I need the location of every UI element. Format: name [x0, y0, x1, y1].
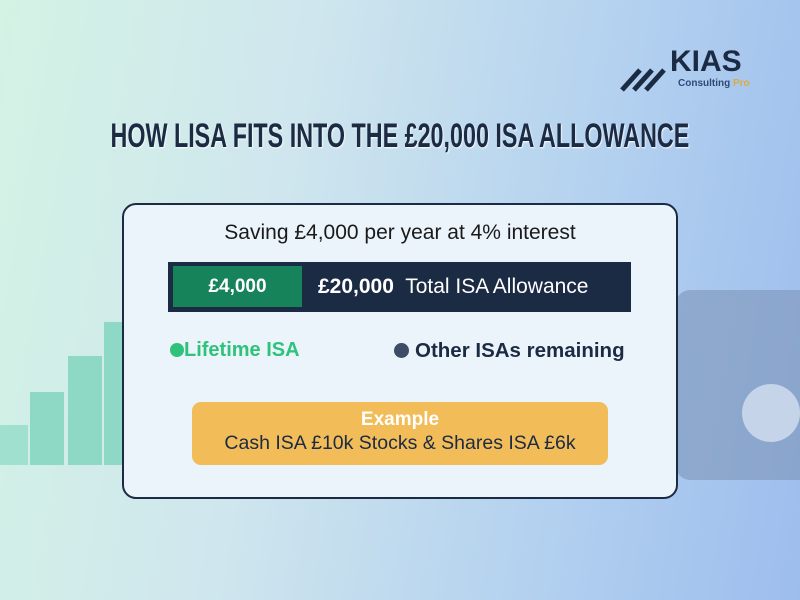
lisa segment: £4,000	[208, 276, 267, 297]
allowance bar	[168, 262, 631, 312]
total label: £20,000 Total ISA Allowance	[318, 275, 588, 298]
logo	[620, 45, 750, 92]
lisa segment	[173, 266, 302, 307]
example box: Example	[361, 409, 439, 430]
example box	[192, 402, 608, 465]
title: HOW LISA FITS INTO THE £20,000 ISA ALLOWANCE	[111, 117, 689, 155]
logo: Consulting Pro	[678, 78, 750, 89]
decorative bar chart background	[0, 322, 122, 465]
logo: KIAS	[670, 45, 742, 78]
panel: card	[122, 203, 678, 499]
decorative device right	[676, 290, 800, 480]
example box: Cash ISA £10k Stocks & Shares ISA £6k	[224, 432, 576, 454]
legend: other isas: Other ISAs remaining	[415, 339, 625, 362]
legend: lifetime isa: Lifetime ISA	[184, 339, 300, 361]
subtitle: Saving £4,000 per year at 4% interest	[224, 221, 576, 244]
